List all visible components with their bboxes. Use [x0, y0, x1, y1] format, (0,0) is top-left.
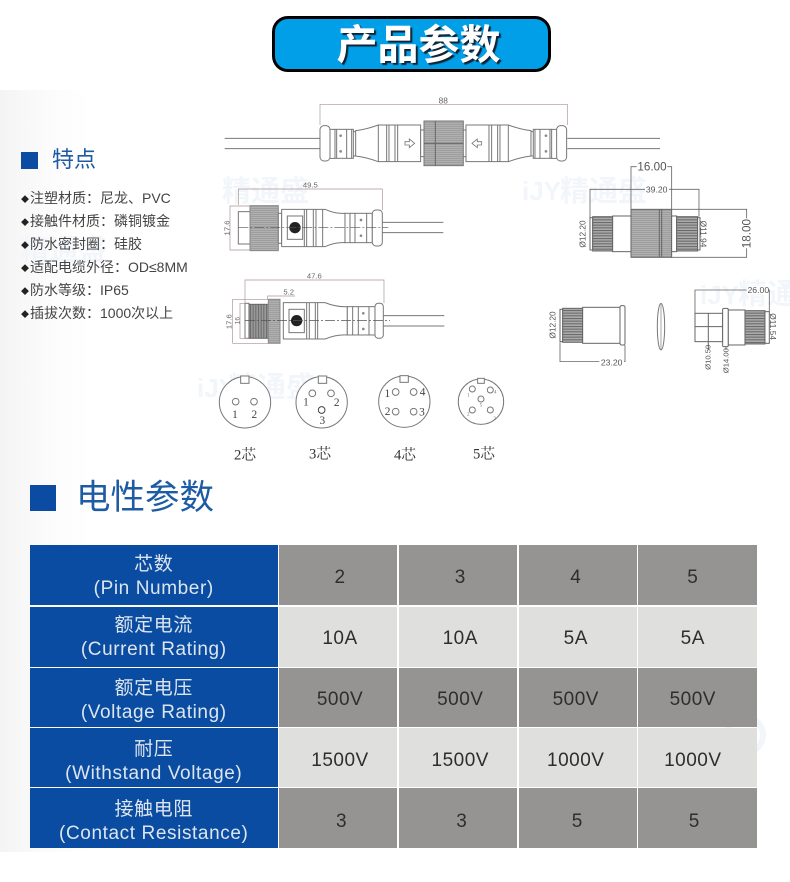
parameter table: 5: [572, 811, 583, 832]
pin diagram: 4 core: 4: [420, 386, 426, 398]
drawing: female plug 47.6: 5.2: [283, 287, 294, 296]
feature list: ◆: [21, 218, 29, 227]
watermarks: iJY: [197, 373, 236, 403]
row: contact resistance: [30, 788, 278, 848]
watermarks: iJY: [522, 176, 561, 206]
pin diagram: 5 core: [458, 378, 504, 462]
drawing: panel socket: [695, 285, 778, 373]
title button: 产品参数: [336, 22, 500, 68]
row: current rating: [30, 606, 278, 666]
row: withstand voltage: [30, 728, 278, 786]
pin diagram: 4 core: [379, 376, 430, 463]
pin diagram: 2 core: [219, 376, 271, 463]
heading marker: electrical parameters: [30, 485, 56, 511]
parameter table: 1500V: [432, 750, 489, 771]
pin diagram: 3 core: [296, 376, 347, 462]
watermarks: 精通盛: [222, 175, 309, 208]
feature list: ◆: [21, 287, 29, 296]
pin diagram: 3 core: 2: [334, 397, 340, 409]
row: withstand voltage: (Withstand Voltage): [65, 763, 242, 784]
pin diagram: 5 core: 3: [493, 417, 496, 422]
drawing: panel socket: 26.00: [747, 285, 769, 295]
drawing: female plug 47.6: 47.6: [307, 272, 322, 281]
row: contact resistance: 接触电阻: [115, 799, 193, 820]
pin diagram: 5 core: 4: [494, 390, 497, 395]
drawing: mated connector: [225, 95, 660, 166]
parameter table: 10A: [322, 628, 358, 648]
parameter table: 500V: [317, 689, 363, 710]
row: withstand voltage: 耐压: [134, 739, 173, 760]
feature list: 适配电缆外径：OD≤8MM: [30, 257, 188, 277]
row: contact resistance: (Contact Resistance): [59, 823, 248, 844]
parameter table: 1500V: [311, 750, 369, 771]
feature list: ◆: [21, 195, 29, 204]
drawing: panel socket: Ø14.00: [722, 348, 731, 373]
pin diagram: 2 core: 2芯: [234, 446, 257, 463]
pin diagram: 3 core: 3: [319, 415, 325, 427]
pin diagram: 2 core: 2: [251, 409, 257, 421]
drawing: threaded sleeve: Ø12.20: [547, 311, 557, 339]
drawing: male plug 49.5: 49.5: [303, 181, 318, 190]
drawing: seal ring: [657, 303, 665, 350]
parameter table: 5A: [564, 628, 588, 648]
watermarks: 精通盛: [560, 175, 647, 208]
parameter table: 10A: [443, 628, 478, 648]
parameter table: 500V: [670, 689, 716, 710]
feature list: ◆: [21, 264, 29, 273]
pin diagram: 5 core: 5: [480, 404, 483, 409]
parameter table: 500V: [553, 689, 599, 710]
parameter table: [30, 545, 757, 848]
heading: electrical parameters: 电性参数: [76, 479, 214, 517]
pin diagram: 5 core: 2: [467, 413, 470, 418]
watermarks: 精通盛: [228, 371, 315, 404]
pin diagram: 2 core: 1: [232, 409, 238, 421]
watermarks: iJY: [700, 280, 739, 310]
feature list: 接触件材质：磷铜镀金: [30, 211, 170, 231]
row: voltage rating: [30, 668, 278, 727]
drawing: coupling nut assembly: Ø11.94: [699, 221, 709, 248]
drawing: coupling nut assembly: [578, 161, 754, 257]
row: voltage rating: 额定电压: [115, 678, 193, 699]
pin diagram: 4 core: 2: [385, 406, 391, 418]
parameter table: 5: [689, 811, 700, 832]
parameter table: 3: [455, 567, 466, 588]
drawing: mated connector: 88: [439, 95, 448, 105]
heading marker: features: [21, 152, 38, 169]
pin diagram: 4 core: 1: [384, 388, 390, 400]
parameter table: 5: [687, 567, 698, 588]
row: pin number: 芯数: [134, 554, 173, 575]
pin diagram: 3 core: 3芯: [309, 445, 332, 462]
feature list: ◆: [21, 241, 29, 250]
row: current rating: (Current Rating): [81, 639, 227, 660]
pin diagram: 4 core: 4芯: [394, 446, 417, 463]
drawing: male plug 49.5: 17.6: [222, 221, 231, 235]
parameter table: 1000V: [664, 750, 722, 771]
parameter table: 1000V: [547, 750, 604, 771]
drawing: coupling nut assembly: Ø12.20: [578, 220, 588, 248]
row: pin number: [30, 545, 278, 605]
parameter table: 3: [456, 811, 467, 832]
pin diagram: 4 core: 3: [419, 407, 425, 419]
drawing: male plug 49.5: [222, 181, 443, 251]
drawing: female plug 47.6: 16: [234, 317, 241, 324]
parameter table: 3: [336, 811, 347, 832]
drawing: coupling nut assembly: 39.20: [646, 184, 668, 194]
pin diagram: 5 core: 5芯: [473, 445, 496, 462]
watermarks: 精通盛: [20, 234, 107, 267]
drawing: panel socket: Ø10.50: [704, 345, 713, 370]
title button: [272, 16, 551, 72]
pin diagram: 5 core: 1: [467, 394, 470, 399]
parameter table: 4: [570, 567, 581, 588]
feature list: 插拔次数：1000次以上: [30, 303, 173, 323]
drawing: female plug 47.6: [224, 272, 444, 343]
drawing: coupling nut assembly: 16.00: [637, 161, 667, 174]
parameter table: 500V: [437, 689, 483, 710]
drawing: panel socket: Ø11.54: [768, 313, 778, 340]
drawing: threaded sleeve: [547, 306, 625, 367]
feature list: [21, 188, 188, 323]
feature list: 注塑材质：尼龙、PVC: [30, 188, 171, 208]
feature list: ◆: [21, 310, 29, 319]
pin diagram: 3 core: 1: [303, 396, 309, 408]
parameter table: 2: [334, 567, 346, 588]
feature list: 防水密封圈：硅胶: [30, 234, 142, 254]
feature list: 防水等级：IP65: [30, 280, 129, 300]
drawing: coupling nut assembly: 18.00: [741, 219, 754, 248]
row: current rating: 额定电流: [115, 615, 193, 636]
heading: features: 特点: [52, 147, 96, 172]
drawing: female plug 47.6: 17.6: [224, 314, 233, 329]
row: voltage rating: (Voltage Rating): [81, 702, 227, 723]
drawing: threaded sleeve: 23.20: [601, 357, 623, 367]
row: pin number: (Pin Number): [94, 578, 214, 599]
parameter table: 5A: [681, 628, 705, 648]
